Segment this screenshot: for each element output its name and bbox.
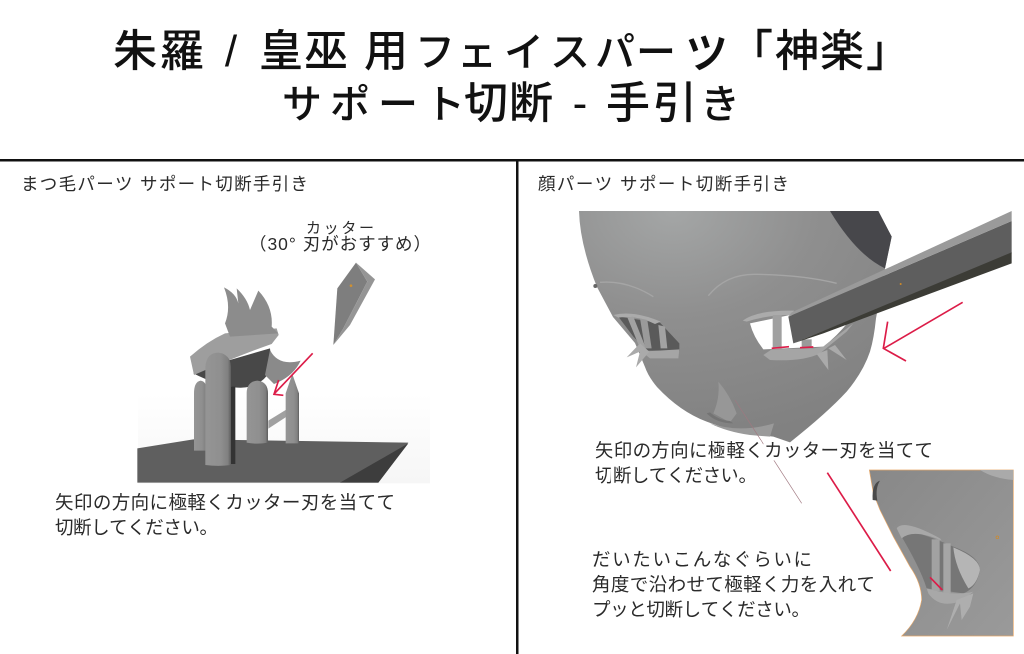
- title: パ: [595, 31, 635, 75]
- title: ス: [550, 31, 590, 75]
- left eye: [613, 313, 679, 367]
- title: ッ: [680, 20, 732, 78]
- head: [579, 211, 892, 442]
- title: ェ: [457, 31, 497, 75]
- red arrow: [274, 353, 313, 395]
- title: き: [700, 83, 740, 127]
- 3D render: side view of face: [827, 470, 1013, 636]
- instruction text: 切断してください。: [55, 517, 218, 538]
- label: cutter blade recommendation: カッター: [306, 220, 374, 237]
- title: 断: [509, 79, 553, 128]
- label: cutter blade recommendation: （30° 刃がおすすめ）: [249, 234, 431, 254]
- title: -: [573, 79, 587, 128]
- red arrow: [883, 302, 963, 361]
- title: 羅: [160, 27, 204, 76]
- 3D render: face with cutter blade: [579, 211, 1012, 503]
- instruction text: 切断してください。: [595, 465, 757, 486]
- right eye: [743, 311, 853, 370]
- red guide line: [827, 473, 891, 571]
- base plate: [137, 439, 408, 483]
- ear stud: [593, 284, 597, 288]
- support pillars: [194, 353, 299, 466]
- thin guide line: [735, 400, 802, 503]
- 3D render: eyelash part with supports: [137, 263, 430, 483]
- ear notch: [873, 481, 880, 501]
- angle instruction text: プッと切断してください。: [592, 599, 810, 620]
- label: cutter blade recommendation: [249, 220, 431, 254]
- red cut mark: [930, 577, 942, 590]
- title: ポ: [330, 83, 370, 127]
- title: ト: [425, 83, 465, 127]
- title: サ: [282, 83, 322, 127]
- panel: face parts: [538, 174, 1013, 636]
- instruction text: [595, 440, 933, 486]
- title: フ: [415, 31, 455, 75]
- cutter blade: [788, 211, 1012, 343]
- brow lines: [600, 274, 837, 297]
- head side: [869, 470, 1013, 636]
- title: ー: [636, 31, 676, 75]
- hair cap shadow: [830, 211, 892, 268]
- angle instruction text: [592, 549, 875, 620]
- eyelash underside: [193, 348, 272, 388]
- title: 「: [729, 27, 773, 76]
- title: 朱: [113, 27, 157, 76]
- heading: eyelash parts: まつ毛パーツ サポート切断手引き: [21, 174, 308, 194]
- eye: [897, 525, 999, 630]
- instruction text: [55, 492, 395, 538]
- eyelash band: [190, 328, 279, 375]
- angle instruction text: だいたいこんなぐらいに: [592, 549, 812, 570]
- title: 楽: [820, 27, 864, 76]
- title: 」: [866, 27, 910, 76]
- title: 引: [653, 79, 697, 128]
- title: 皇: [259, 27, 303, 76]
- title: ー: [378, 83, 418, 127]
- instruction text: 矢印の方向に極軽くカッター刃を当てて: [595, 440, 933, 461]
- title: 神: [775, 27, 819, 76]
- title: 切: [464, 79, 508, 128]
- red cut marks: [772, 347, 813, 348]
- eyelash spikes: [224, 287, 278, 337]
- angle instruction text: 角度で沿わせて極軽く力を入れて: [592, 574, 875, 595]
- panel dividers: [0, 159, 1024, 654]
- wing tip: [265, 350, 301, 384]
- title: 手: [606, 79, 650, 128]
- mouth: [710, 423, 774, 437]
- heading: face parts: 顔パーツ サポート切断手引き: [538, 174, 789, 194]
- nose: [707, 382, 737, 423]
- title: 巫: [304, 27, 348, 76]
- title: [113, 20, 910, 128]
- title: /: [225, 27, 238, 76]
- title: イ: [504, 31, 544, 75]
- panel: eyelash parts: [21, 174, 431, 538]
- cutter blade: [333, 263, 375, 345]
- title: 用: [364, 27, 408, 76]
- instruction text: 矢印の方向に極軽くカッター刃を当てて: [55, 492, 395, 513]
- forehead highlight: [980, 470, 1013, 480]
